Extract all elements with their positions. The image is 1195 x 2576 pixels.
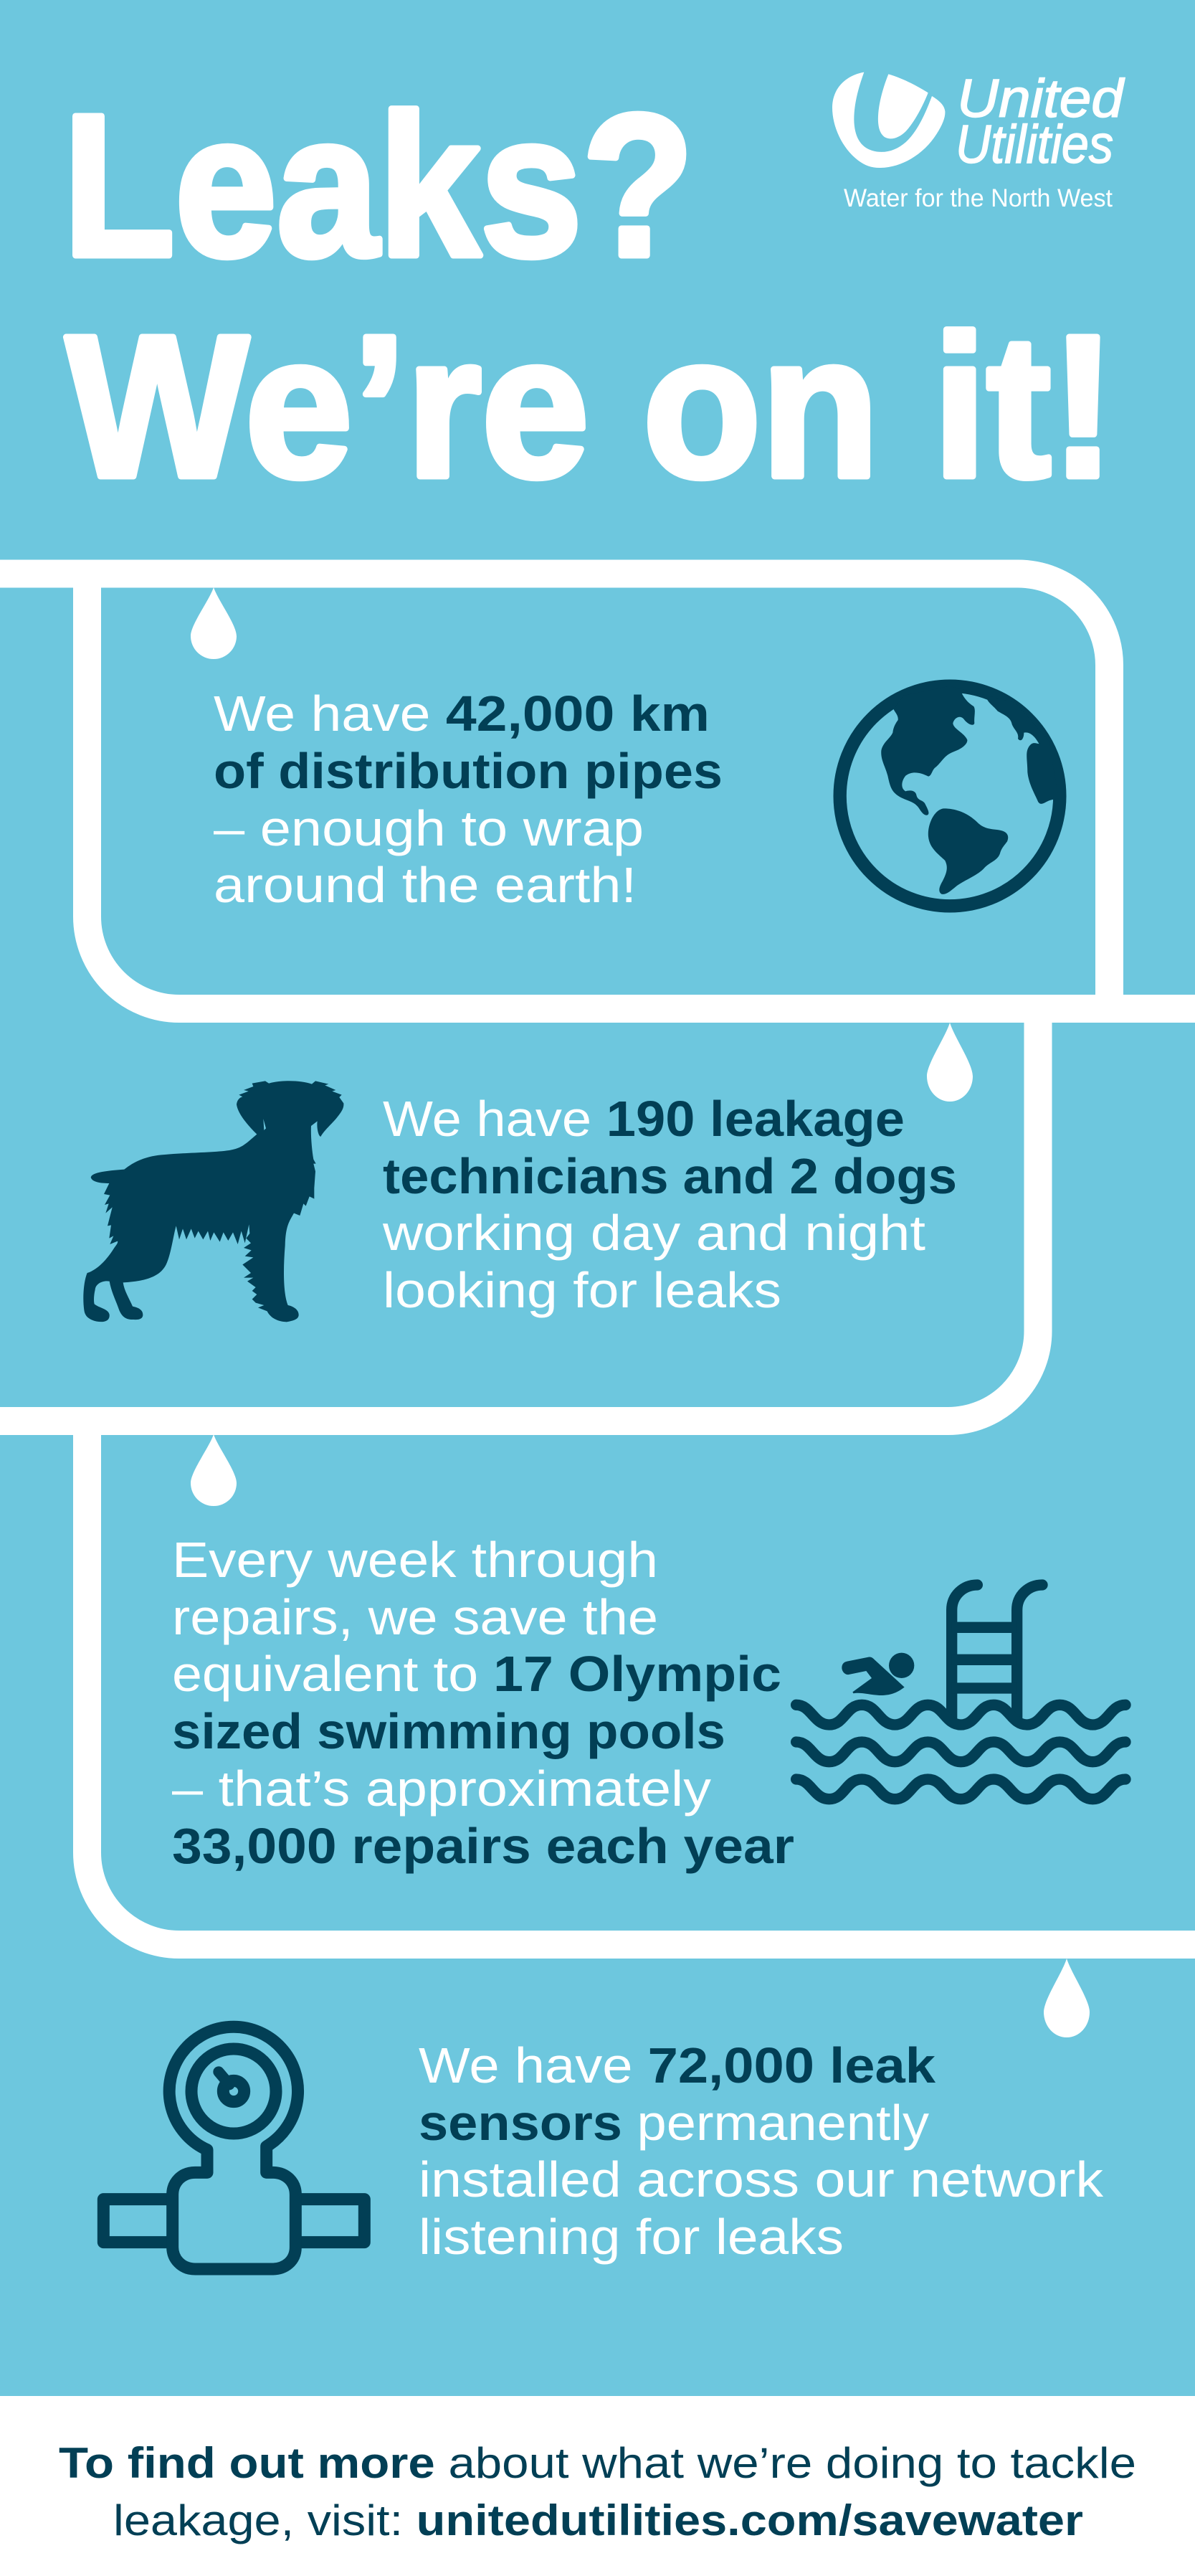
- text: 190 technicians and 2 dogs: technicians and 2 dogs: [383, 1148, 957, 1204]
- text: 190 technicians and 2 dogs: [382, 1091, 957, 1318]
- text: 190 technicians and 2 dogs: looking for leaks: [383, 1262, 781, 1318]
- title: We’re on it!: [66, 293, 1115, 519]
- text: 17 Olympic pools, 33,000 repairs: – that’s approximately: [172, 1761, 711, 1817]
- text: 17 Olympic pools, 33,000 repairs: [172, 1532, 794, 1874]
- icon: swimming pool: [796, 1585, 1125, 1799]
- title: [63, 72, 1115, 519]
- logo symbol: [832, 72, 945, 168]
- text: 72,000 leak sensors: We have 72,000 leak: [419, 2037, 935, 2093]
- text: 72,000 leak sensors: [419, 2037, 1104, 2265]
- text: 190 technicians and 2 dogs: working day and night: [382, 1205, 925, 1261]
- text: 42,000 km of pipes: [214, 686, 723, 913]
- title: Leaks?: [63, 72, 694, 298]
- text: 17 Olympic pools, 33,000 repairs: repairs, we save the: [172, 1589, 658, 1645]
- footer panel: [0, 2396, 1195, 2576]
- text: 17 Olympic pools, 33,000 repairs: equivalent to 17 Olympic: [172, 1646, 781, 1702]
- text: 17 Olympic pools, 33,000 repairs: sized swimming pools: [172, 1703, 725, 1759]
- text: 42,000 km of pipes: around the earth!: [214, 857, 637, 913]
- swimmer: [842, 1653, 914, 1695]
- footer text: leakage, visit: unitedutilities.com/savewater: [113, 2496, 1083, 2544]
- text: 17 Olympic pools, 33,000 repairs: Every week through: [172, 1532, 658, 1588]
- text: 72,000 leak sensors: installed across our network: [419, 2151, 1104, 2207]
- logo wordmark: [956, 68, 1125, 174]
- waves: [796, 1705, 1125, 1799]
- icon: dog: [83, 1081, 343, 1322]
- logo wordmark: United: [957, 68, 1125, 128]
- water drop 4: [1044, 1959, 1090, 2037]
- pipes: [0, 574, 1195, 1945]
- text: 42,000 km of pipes: – enough to wrap: [214, 800, 644, 856]
- logo wordmark: Utilities: [956, 114, 1113, 174]
- text: 17 Olympic pools, 33,000 repairs: 33,000 repairs each year: [172, 1818, 794, 1874]
- text: 190 technicians and 2 dogs: We have 190 leakage: [383, 1091, 905, 1147]
- text: 72,000 leak sensors: listening for leaks: [419, 2209, 844, 2265]
- logo: United Utilities: [832, 68, 1125, 212]
- water drop 1: [191, 587, 237, 659]
- logo tagline: Water for the North West: [844, 184, 1113, 212]
- water drop 2: [927, 1023, 973, 1102]
- footer text: To find out more about what we’re doing to tackle: [59, 2439, 1136, 2487]
- footer text: [59, 2439, 1136, 2544]
- text: 72,000 leak sensors: sensors permanently: [419, 2095, 929, 2151]
- pool ladder: [952, 1585, 1042, 1719]
- icon: leak sensor: [103, 2027, 364, 2269]
- text: 42,000 km of pipes: We have 42,000 km: [214, 686, 710, 742]
- text: 42,000 km of pipes: of distribution pipes: [214, 743, 723, 799]
- water drop 3: [191, 1434, 237, 1506]
- icon: globe: [840, 686, 1060, 906]
